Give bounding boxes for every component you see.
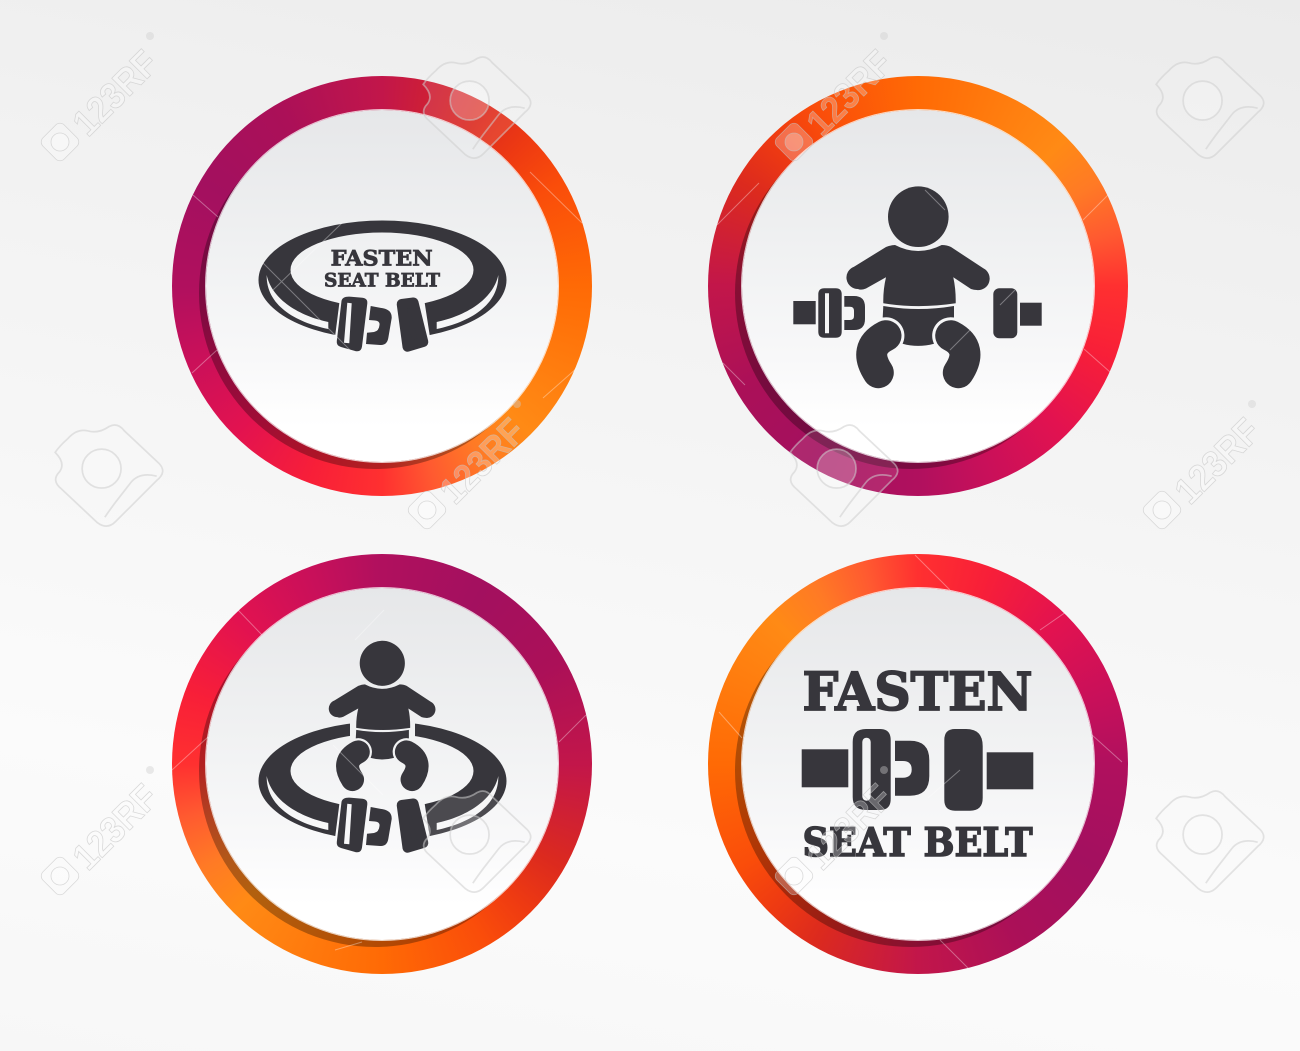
- inner disc: [742, 588, 1094, 940]
- text: fasten: FASTEN: [331, 247, 433, 272]
- baby figure: [846, 186, 990, 373]
- 123RF text watermarks: 123RF: [65, 777, 166, 878]
- text: seat belt: SEAT BELT: [324, 270, 440, 292]
- gradient ring: [172, 554, 592, 974]
- right buckle and belt: [944, 729, 1033, 811]
- text: seat belt: SEAT BELT: [802, 820, 1032, 866]
- 123RF text watermarks: 123RF: [65, 43, 166, 144]
- buckle tongue: [366, 306, 392, 345]
- 123RF text watermarks: 123RF: [1167, 411, 1268, 512]
- text: fasten: FASTEN: [802, 662, 1032, 723]
- inner disc: [742, 110, 1094, 462]
- 123RF text watermarks: [39, 32, 1268, 897]
- gradient ring: [172, 76, 592, 496]
- ring inner shadow: [199, 595, 551, 947]
- right buckle: [402, 804, 423, 848]
- inner disc: [206, 588, 558, 940]
- icon: baby in oval belt: [258, 640, 506, 853]
- belt band: [258, 220, 507, 340]
- baby figure: [329, 641, 435, 780]
- buckle tongue: [366, 807, 392, 846]
- left belt and buckle: [793, 288, 865, 338]
- 123RF text watermarks: 123RF: [432, 411, 533, 512]
- ring inner shadow: [735, 595, 1087, 947]
- gradient ring: [708, 554, 1128, 974]
- left buckle: [337, 297, 367, 351]
- icon: baby with belt buckle: [793, 186, 1042, 388]
- left belt and buckle: [802, 729, 929, 810]
- panel: baby with seat belt: [708, 76, 1128, 496]
- icon: buckle with headline text: [802, 662, 1034, 866]
- ring inner shadow: [199, 117, 551, 469]
- 123RF text watermarks: 123RF: [799, 777, 900, 878]
- stamp watermarks: [55, 57, 1264, 892]
- left buckle: [337, 798, 367, 852]
- icon: oval belt with buckle and text: [258, 220, 506, 352]
- panel: baby inside belt ring: [172, 554, 592, 974]
- panel: fasten seat belt around belt ring: [172, 76, 592, 496]
- right buckle: [402, 302, 423, 347]
- gradient ring: [708, 76, 1128, 496]
- belt band: [258, 721, 507, 841]
- ring inner shadow: [735, 117, 1087, 469]
- 123RF text watermarks: 123RF: [799, 43, 900, 144]
- inner disc: [206, 110, 558, 462]
- right buckle and belt: [993, 288, 1042, 338]
- panel: fasten seat belt text with buckle: [708, 554, 1128, 974]
